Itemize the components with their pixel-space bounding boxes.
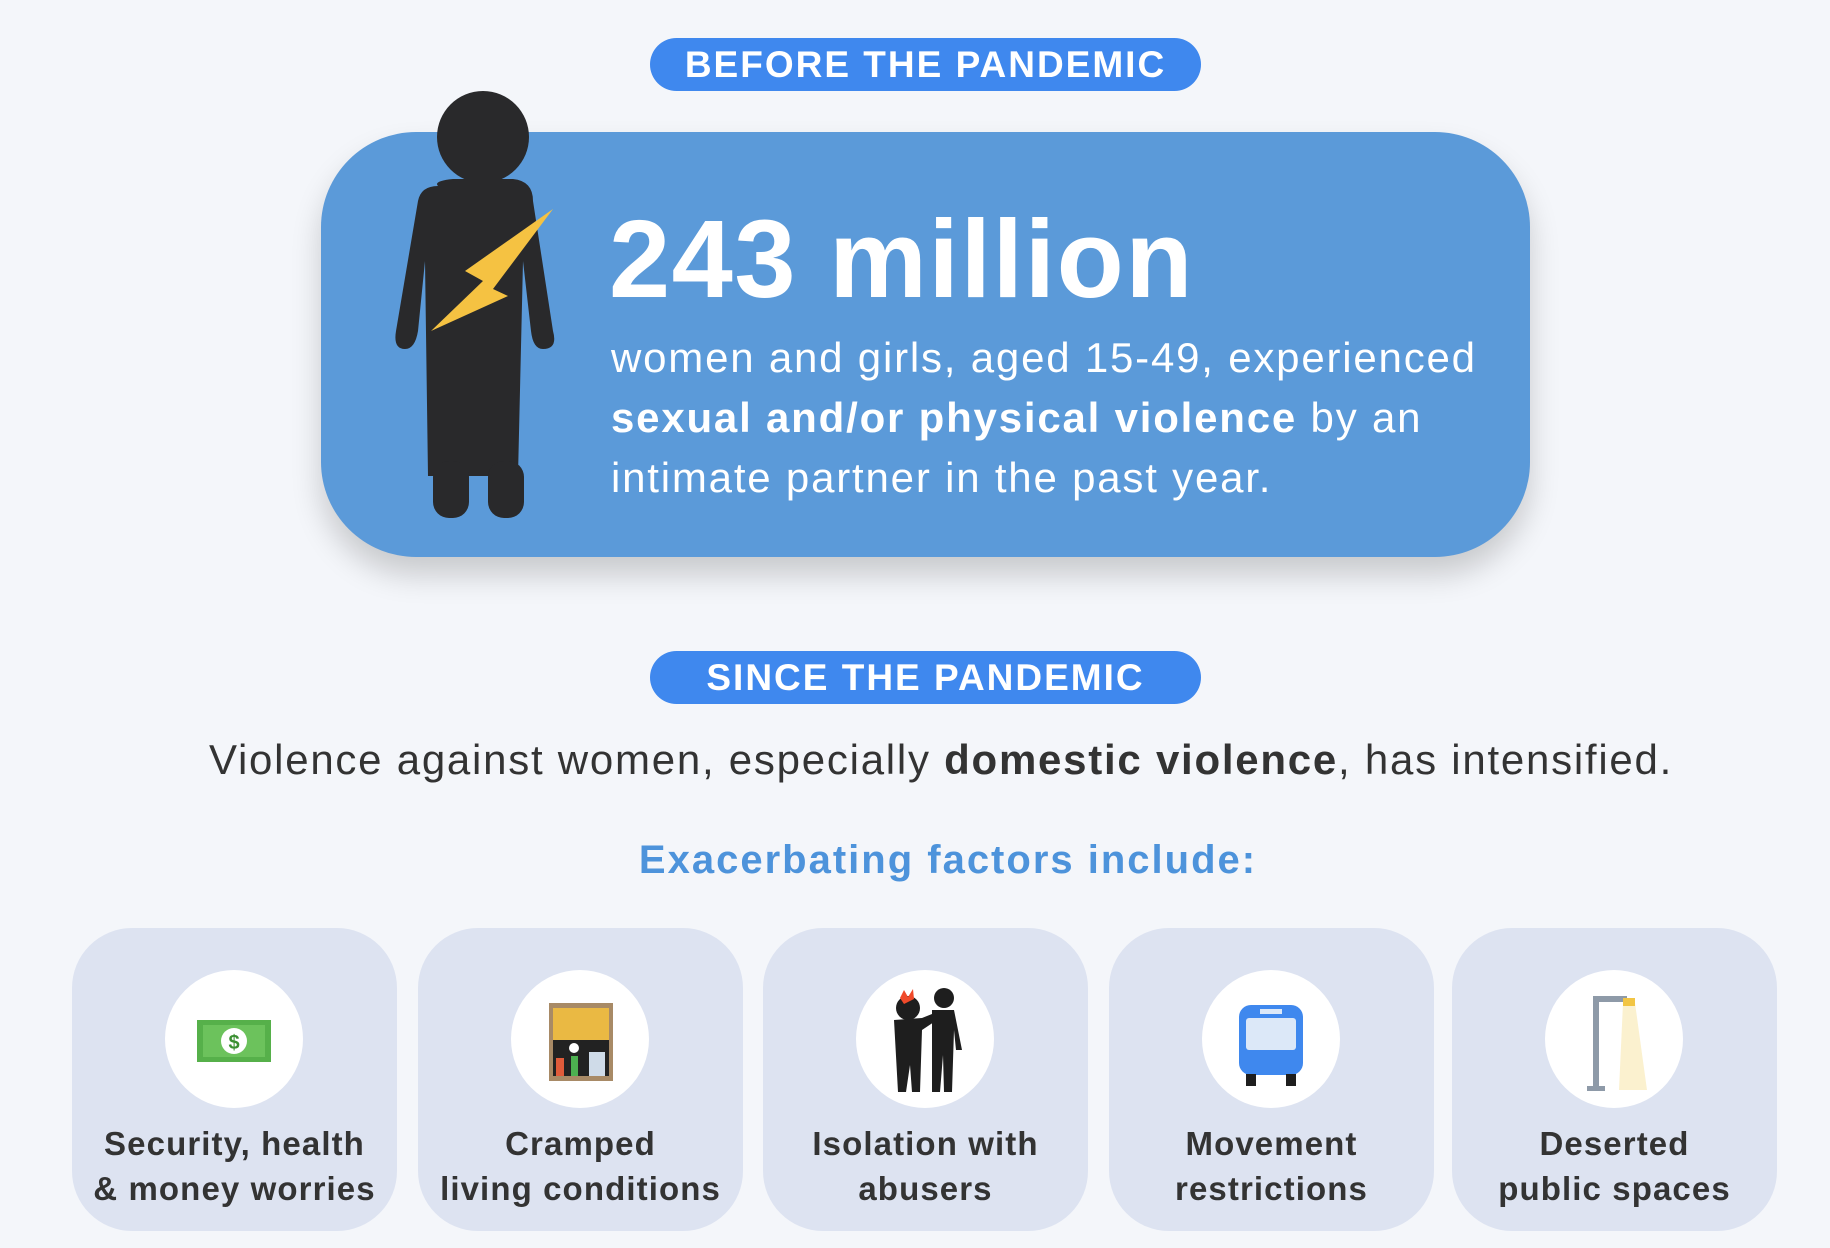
- label: [1498, 1125, 1731, 1207]
- card: movement restrictions: [1109, 928, 1434, 1231]
- label: [93, 1125, 376, 1207]
- card: deserted public spaces: [1452, 928, 1777, 1231]
- label: & money worries: [93, 1170, 376, 1207]
- label: Security, health: [104, 1125, 365, 1162]
- stat description: [611, 334, 1477, 501]
- label: Movement: [1186, 1125, 1358, 1162]
- label: public spaces: [1498, 1170, 1731, 1207]
- pill: before the pandemic: BEFORE THE PANDEMIC: [685, 44, 1166, 85]
- icon: woman with lightning bolt: [395, 91, 554, 518]
- label: Isolation with: [812, 1125, 1039, 1162]
- panel: 243 million stat: [321, 132, 1530, 557]
- pill: before the pandemic: [650, 38, 1201, 91]
- label: [1175, 1125, 1368, 1207]
- label: [812, 1125, 1039, 1207]
- pill: since the pandemic: [650, 651, 1201, 704]
- stat number: 243 million: [609, 198, 1194, 321]
- label: Cramped: [505, 1125, 656, 1162]
- card: cramped living: [418, 928, 743, 1231]
- label: abusers: [858, 1170, 993, 1207]
- stat description: sexual and/or physical violence by an: [611, 394, 1422, 441]
- stat description: women and girls, aged 15-49, experienced: [611, 334, 1477, 381]
- icon: dollar bill: [165, 970, 303, 1108]
- icon: cramped room: [511, 970, 649, 1108]
- label: [440, 1125, 721, 1207]
- card: money worries: [72, 928, 397, 1231]
- icon: bus: [1202, 970, 1340, 1108]
- pill: since the pandemic: SINCE THE PANDEMIC: [706, 657, 1145, 698]
- label: living conditions: [440, 1170, 721, 1207]
- label: Deserted: [1539, 1125, 1690, 1162]
- label: restrictions: [1175, 1170, 1368, 1207]
- stat description: intimate partner in the past year.: [611, 454, 1272, 501]
- card: isolation: [763, 928, 1088, 1231]
- heading: exacerbating factors: Exacerbating factors include:: [639, 838, 1257, 882]
- text: intensified violence: Violence against women, especially domestic violence, has intensified.: [209, 736, 1673, 783]
- icon: street lamp: [1545, 970, 1683, 1108]
- icon: abuser and victim: [856, 970, 994, 1108]
- icon: dollar bill: $: [228, 1032, 240, 1054]
